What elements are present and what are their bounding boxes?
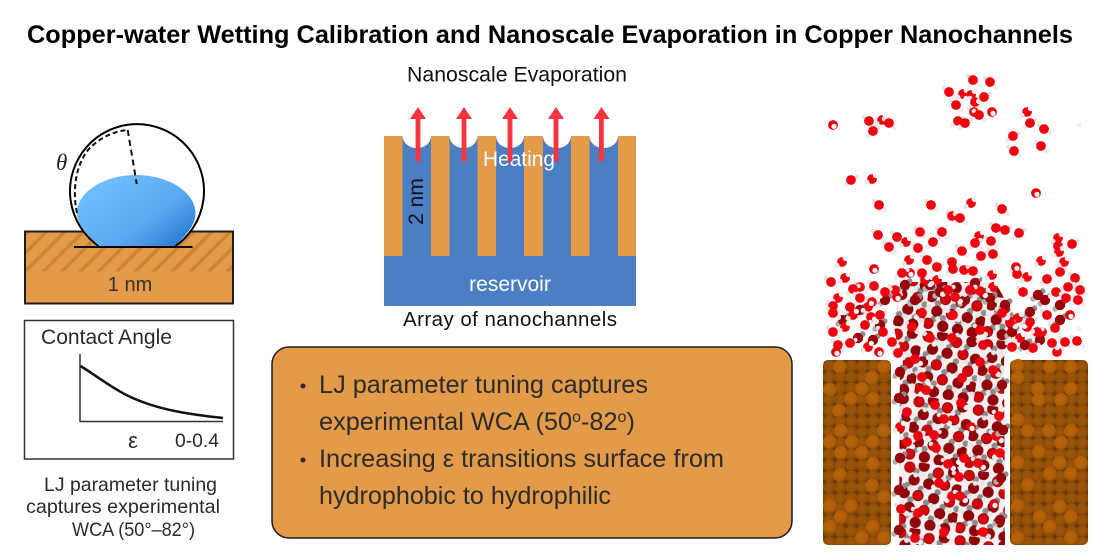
title: Copper-water Wetting Calibration and Nanoscale Evaporation in Copper Nanochannels (27, 21, 1073, 49)
bullet one: LJ parameter tuning captures (319, 371, 648, 399)
caption: wetting calibration (26, 474, 220, 541)
thickness label: 1 nm (108, 274, 152, 296)
bullet one: -82 (581, 408, 618, 436)
evaporation arrows (410, 107, 610, 162)
theta label: θ (56, 150, 67, 175)
x axis range label: 0-0.4 (175, 431, 219, 452)
dashed contact angle arc (75, 130, 128, 213)
reservoir label: reservoir (469, 273, 551, 296)
water channels and reservoir (384, 136, 636, 306)
chart title: Contact Angle (41, 326, 172, 349)
left copper wall (823, 360, 891, 545)
caption: wetting calibration: WCA (50°–82°) (72, 519, 195, 541)
bullet one: ) (626, 408, 635, 436)
caption: array of nanochannels: Array of nanochannels (403, 308, 617, 331)
chart frame (24, 320, 234, 459)
panel: droplet on copper substrate (25, 124, 233, 304)
caption: wetting calibration: LJ parameter tuning (44, 474, 217, 496)
bullet two (300, 445, 724, 510)
bullet one: o (618, 409, 627, 426)
baseline line (74, 246, 192, 248)
panel: key findings callout (272, 347, 792, 538)
substrate block (25, 232, 233, 304)
contact angle curve (80, 366, 223, 418)
water: cloud above the channel mouth (826, 254, 1088, 360)
water: vapor molecules above the surface (824, 74, 1081, 293)
bullet one: experimental WCA (50 (319, 408, 572, 436)
x axis epsilon label: ε (128, 428, 138, 453)
water: bright molecules in the channel (891, 307, 1010, 545)
contact circle (70, 124, 204, 247)
dashed radius line (128, 130, 137, 184)
water droplet (77, 175, 196, 247)
bullet one (300, 371, 648, 436)
heading: nanoscale evaporation: Nanoscale Evaporation (407, 64, 627, 86)
bullet two: hydrophobic to hydrophilic (319, 482, 611, 510)
bullet one: o (572, 409, 581, 426)
channel width label: 2 nm (405, 178, 428, 225)
panel: molecular dynamics snapshot (823, 74, 1088, 545)
bullet two: Increasing ε transitions surface from (319, 445, 724, 473)
copper walls (384, 136, 636, 256)
heating label: Heating (483, 148, 555, 171)
right copper wall (1010, 359, 1088, 545)
chart axes (80, 354, 223, 422)
panel: contact angle chart (24, 320, 234, 459)
water: dense column in channel (893, 282, 1018, 545)
menisci (402, 136, 618, 148)
callout box (272, 347, 792, 538)
panel: nanochannel array schematic (384, 64, 636, 331)
caption: wetting calibration: captures experimental (26, 496, 220, 518)
